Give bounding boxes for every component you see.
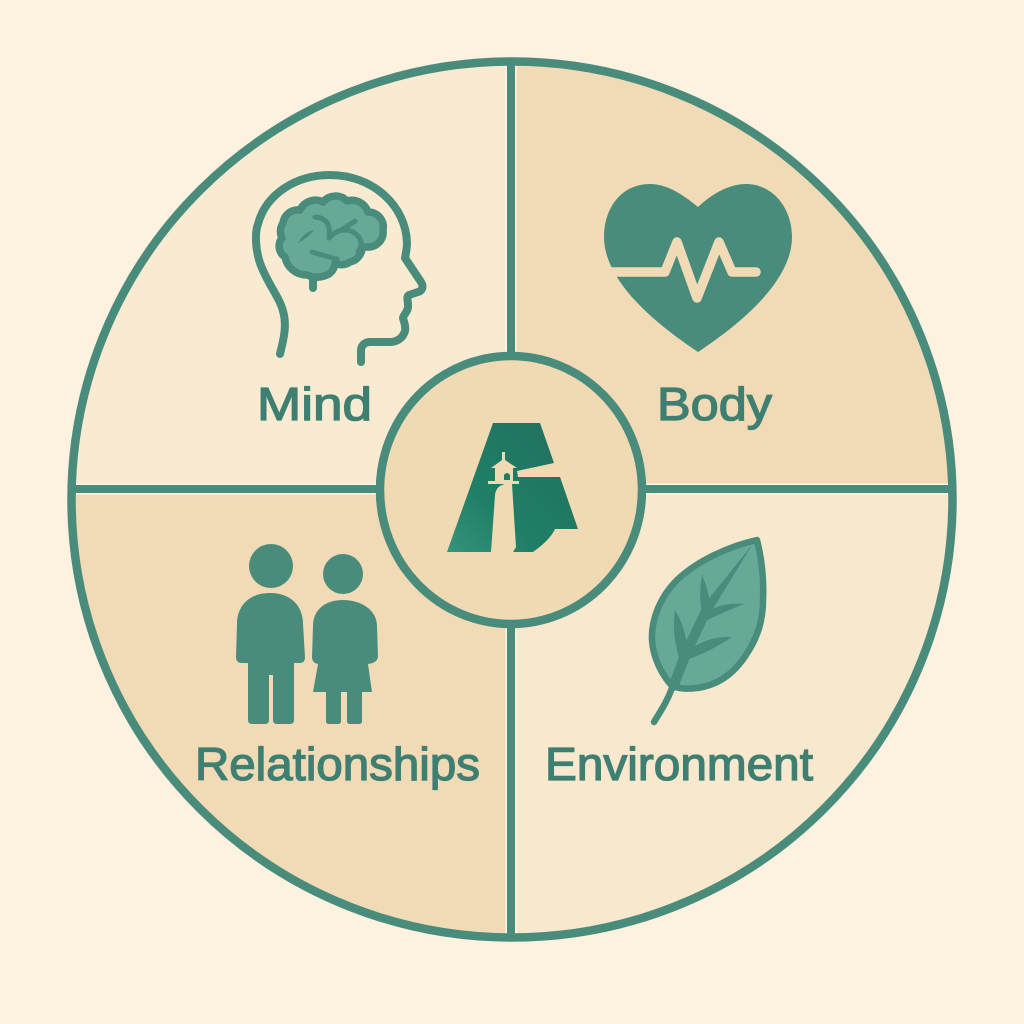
center circle with logo bbox=[380, 356, 642, 624]
leaf blade bbox=[652, 540, 763, 689]
panel: environment quadrant bbox=[511, 489, 961, 949]
icon: two people bbox=[236, 544, 378, 724]
label: Body: Body bbox=[657, 378, 772, 430]
head outline bbox=[256, 175, 422, 362]
lighthouse lantern bbox=[488, 452, 519, 484]
label: Environment: Environment bbox=[545, 738, 813, 790]
panel: mind quadrant bbox=[60, 50, 511, 489]
panel: relationships quadrant bbox=[60, 489, 511, 949]
brain bbox=[279, 196, 383, 277]
person two bbox=[312, 554, 378, 724]
leaf veins bbox=[674, 575, 744, 664]
panel: body quadrant bbox=[511, 50, 961, 489]
person one bbox=[236, 544, 305, 724]
outer ring bbox=[72, 62, 952, 938]
icon: head with brain bbox=[256, 175, 422, 362]
icon: heart with pulse bbox=[604, 184, 792, 352]
wheel with four quadrants bbox=[60, 50, 961, 949]
brain folds bbox=[312, 217, 361, 259]
leaf midrib bbox=[668, 545, 752, 688]
pulse line bbox=[606, 242, 756, 298]
logo: lighthouse A bbox=[447, 423, 578, 552]
brain stem bbox=[309, 278, 317, 288]
heart bbox=[604, 184, 792, 352]
lighthouse tower bbox=[491, 484, 516, 552]
label: Relationships: Relationships bbox=[195, 738, 480, 790]
icon: leaf bbox=[652, 540, 763, 722]
leaf stem bbox=[654, 688, 672, 722]
center disc bbox=[380, 356, 642, 624]
label: Mind: Mind bbox=[257, 378, 372, 430]
lighthouse window bbox=[504, 473, 510, 480]
